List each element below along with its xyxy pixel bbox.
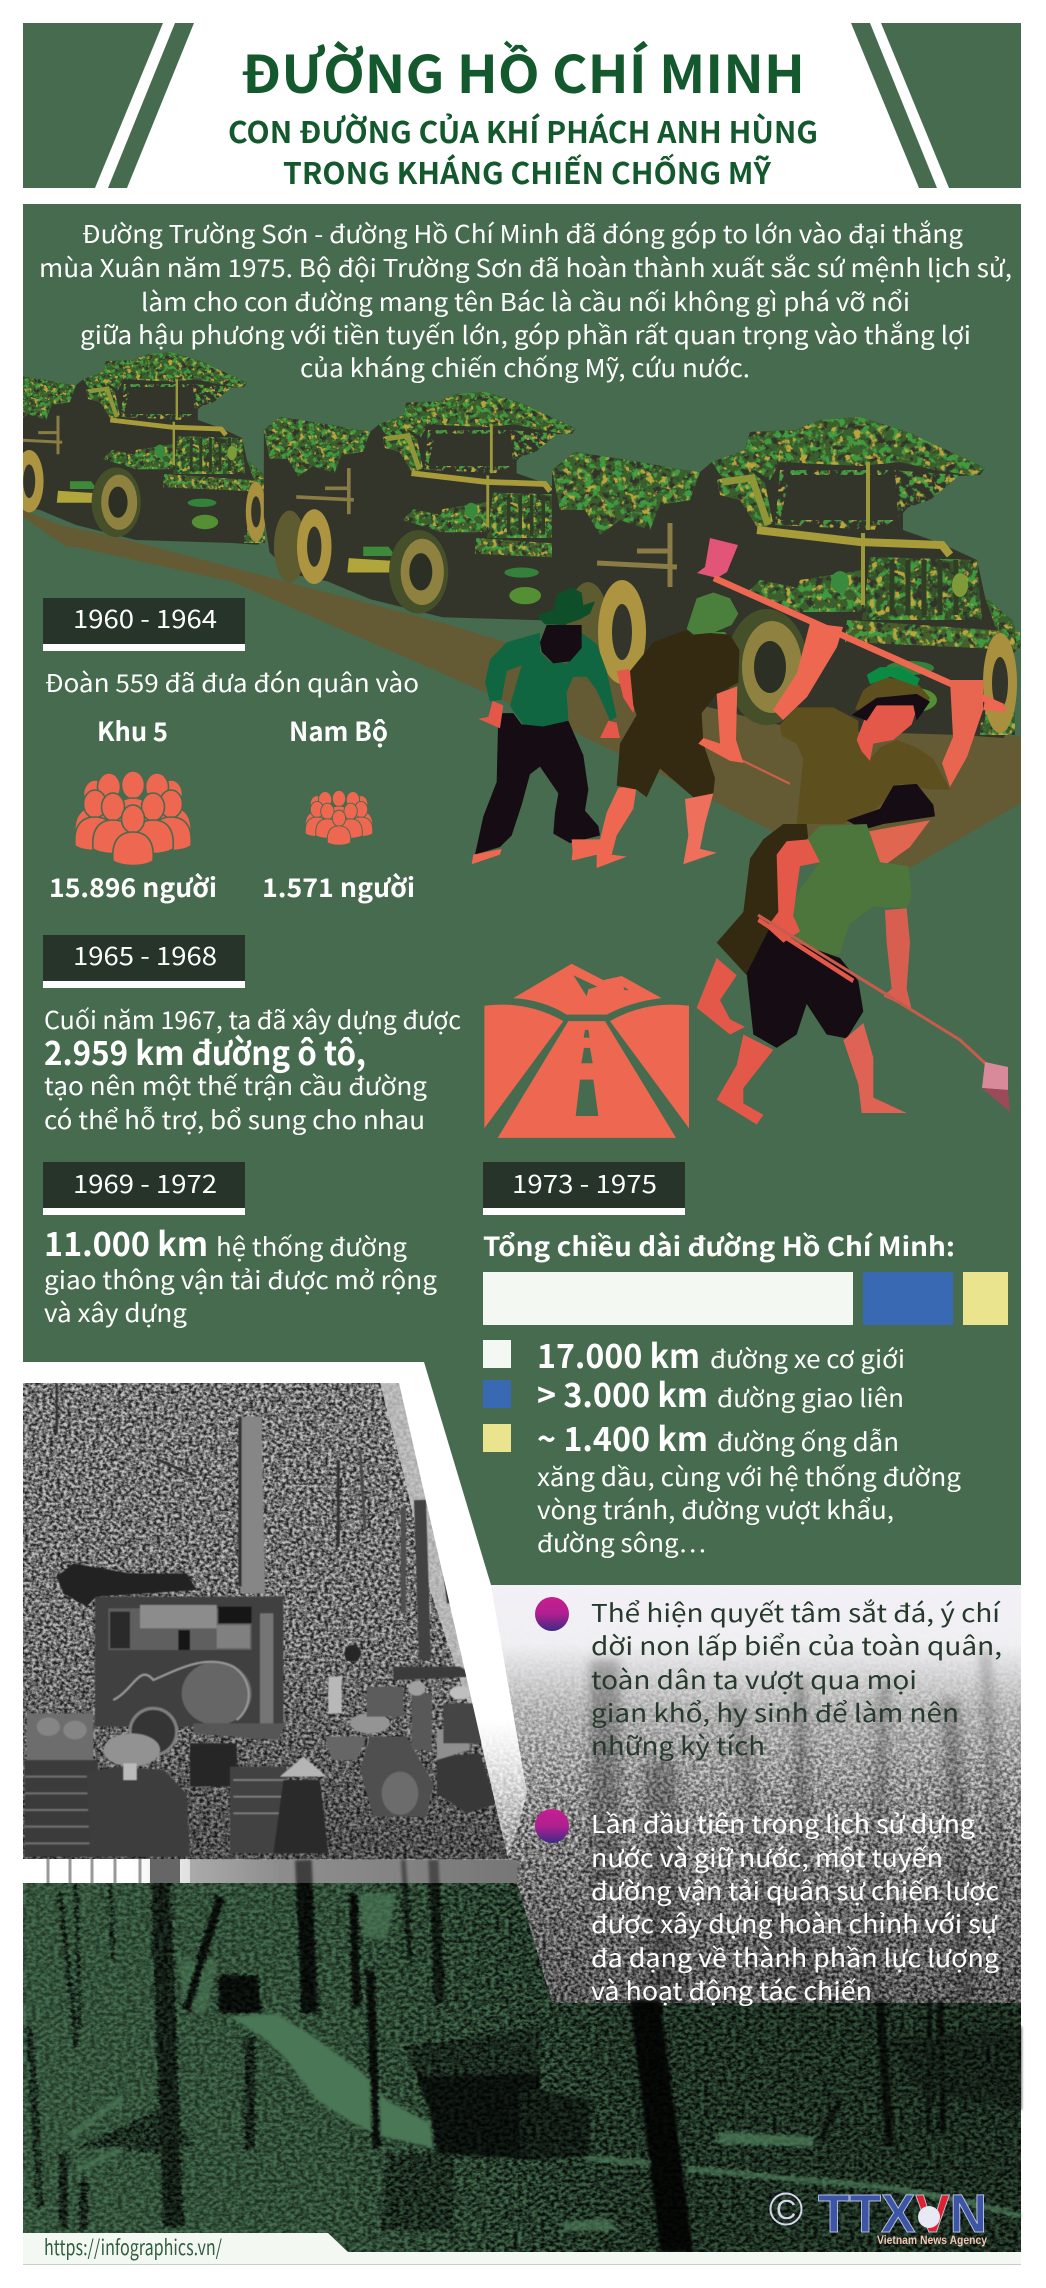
- worker with hoe in front: [697, 820, 930, 1124]
- icon: large crowd: [75, 771, 191, 866]
- footer strip with source link: [23, 2232, 1021, 2264]
- value: 1.571 người: 1.571 người: [262, 868, 415, 905]
- value: 15.896 người: 15.896 người: [49, 868, 217, 905]
- text: troop transport: Đoàn 559 đã đưa đón quân vào: [45, 665, 419, 700]
- text: road building 1967: 2.959 km đường ô tô,: [44, 1027, 366, 1075]
- date tag: 1960 - 1964: 1960 - 1964: [73, 600, 217, 636]
- text: road building 1967: Cuối năm 1967, ta đã xây dựng được: [44, 1002, 461, 1037]
- bullet text 1: [591, 1595, 1002, 1763]
- intro text: làm cho con đường mang tên Bác là cầu nối không gì phá vỡ nổi: [141, 284, 910, 319]
- intro text: Đường Trường Sơn - đường Hồ Chí Minh đã đóng góp to lớn vào đại thắng: [82, 216, 963, 251]
- legend: đường ống dẫn: [717, 1424, 899, 1459]
- stacked bar chart: [483, 1272, 1008, 1325]
- worker with pickaxe: back view: [572, 593, 790, 868]
- green tint overlay on jungle photo: [23, 1883, 1021, 2252]
- bullet text 2: được xây dựng hoàn chỉnh với sự: [591, 1906, 998, 1941]
- bullet text 1: những kỳ tích: [591, 1728, 765, 1763]
- bullet text 2: nước và giữ nước, một tuyến: [591, 1840, 943, 1875]
- subtitle: TRONG KHÁNG CHIẾN CHỐNG MỸ: [283, 149, 772, 193]
- bullet text 2: [591, 1806, 999, 2008]
- bullet text 2: Lần đầu tiên trong lịch sử dựng: [591, 1806, 975, 1841]
- hoe: [758, 915, 1010, 1112]
- heading: total length: Tổng chiều dài đường Hồ Chí Minh:: [483, 1227, 955, 1264]
- bullet text 1: dời non lấp biển của toàn quân,: [591, 1628, 1002, 1663]
- label: Khu 5: Khu 5: [97, 712, 168, 749]
- legend: đường sông…: [537, 1525, 706, 1560]
- text: 11.000 km network: 11.000 km: [44, 1218, 208, 1266]
- text: 11.000 km network: giao thông vận tải được mở rộng: [44, 1262, 437, 1297]
- legend: vòng tránh, đường vượt khẩu,: [537, 1492, 894, 1527]
- photo: road in jungle, green tint: [23, 1860, 1022, 2252]
- icon: small crowd: [305, 790, 373, 845]
- text: road building 1967: tạo nên một thế trận cầu đường: [44, 1068, 427, 1103]
- legend: đường giao liên: [717, 1380, 904, 1415]
- illustration: road strip: [23, 510, 1021, 868]
- bullet text 2: đường vận tải quân sự chiến lược: [591, 1873, 999, 1908]
- logo: copyright and TTXVN: C: [776, 2194, 796, 2225]
- intro text: của kháng chiến chống Mỹ, cứu nước.: [300, 350, 750, 385]
- bullet text 2: và hoạt động tác chiến: [591, 1973, 872, 2008]
- photo: bulldozer and workers on the mountain: [23, 1383, 523, 1860]
- subtitle: CON ĐƯỜNG CỦA KHÍ PHÁCH ANH HÙNG: [228, 108, 818, 152]
- header right band: [881, 23, 1021, 188]
- intro text: mùa Xuân năm 1975. Bộ đội Trường Sơn đã hoàn thành xuất sắc sứ mệnh lịch sử,: [39, 250, 1012, 285]
- illustration: truck convoy: [0, 352, 1021, 738]
- bullet text 2: đa dạng về thành phần lực lượng: [591, 1940, 999, 1975]
- header left band: [23, 23, 163, 188]
- legend: [483, 1330, 961, 1560]
- date tag: 1973 - 1975: [483, 1162, 685, 1215]
- footer strip with source link: https://infographics.vn/: [44, 2232, 222, 2262]
- bullet text 1: gian khổ, hy sinh để làm nên: [591, 1695, 959, 1730]
- intro text: [39, 216, 1012, 385]
- intro text: giữa hậu phương với tiền tuyến lớn, góp phần rất quan trọng vào thắng lợi: [80, 317, 971, 352]
- text: 11.000 km network: hệ thống đường: [216, 1229, 407, 1264]
- panel: main green background: [23, 204, 1021, 1585]
- legend: đường xe cơ giới: [710, 1341, 905, 1376]
- legend: > 3.000 km: [537, 1369, 708, 1417]
- worker with raised arms: [773, 623, 1007, 830]
- date tag: 1965 - 1968: 1965 - 1968: [73, 937, 217, 973]
- bullet: icon 1: [535, 1597, 569, 1631]
- panel: header background: [23, 23, 1021, 188]
- logo: copyright and TTXVN: TTXVN: [818, 2184, 987, 2244]
- text: 11.000 km network: và xây dựng: [44, 1295, 187, 1330]
- date tag: 1969 - 1972: [43, 1162, 245, 1215]
- fog strip below bulldozer photo: [23, 1859, 520, 1883]
- bullet text 1: Thể hiện quyết tâm sắt đá, ý chí: [591, 1595, 1001, 1630]
- subtitle: [228, 108, 818, 193]
- date tag: 1973 - 1975: 1973 - 1975: [512, 1165, 657, 1201]
- date tag: 1969 - 1972: 1969 - 1972: [73, 1165, 217, 1201]
- date tag: 1960 - 1964: [43, 598, 245, 651]
- legend: xăng dầu, cùng với hệ thống đường: [537, 1459, 961, 1494]
- bullet: icon 2: [535, 1809, 569, 1843]
- text: road building 1967: có thể hỗ trợ, bổ sung cho nhau: [44, 1102, 425, 1137]
- white frame band around photo: [23, 1362, 527, 1860]
- photo: foggy forest: [144, 1585, 1021, 2003]
- pickaxe: [697, 538, 1003, 707]
- icon: road through mountains: [484, 964, 689, 1138]
- worker with hat: [472, 588, 620, 864]
- bullet text 1: toàn dân ta vượt qua mọi: [591, 1662, 917, 1697]
- date tag: 1965 - 1968: [43, 935, 245, 988]
- illustration: road workers: [472, 538, 1010, 1124]
- logo: copyright and TTXVN: Vietnam News Agency: [877, 2235, 988, 2247]
- legend: 17.000 km: [537, 1330, 700, 1378]
- text: road building 1967: [44, 1002, 461, 1137]
- legend: ~ 1.400 km: [537, 1413, 708, 1461]
- label: Nam Bộ: Nam Bộ: [289, 712, 388, 749]
- title: ĐƯỜNG HỒ CHÍ MINH: [241, 33, 805, 108]
- text: 11.000 km network: [44, 1218, 437, 1330]
